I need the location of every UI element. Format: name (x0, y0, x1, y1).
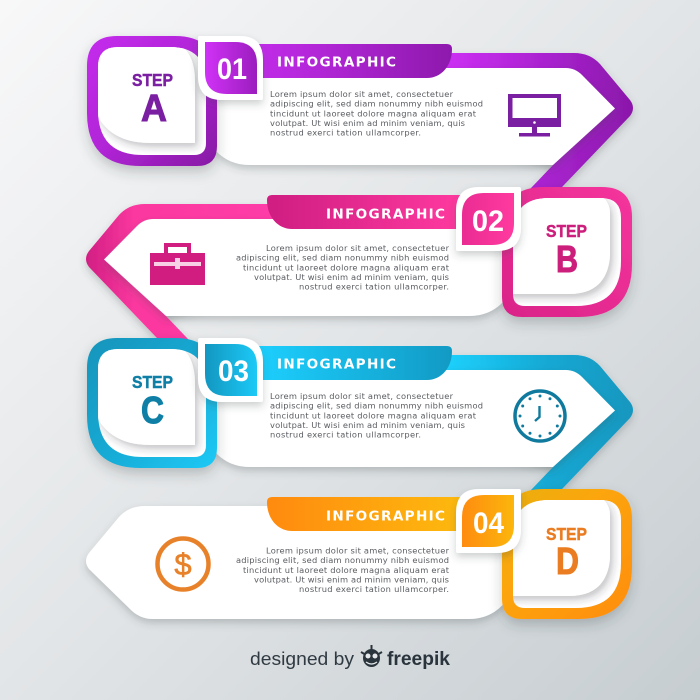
header bar (267, 195, 464, 229)
text block: adipiscing elit, sed diam nonummy nibh euismod (236, 555, 449, 565)
text block: adipiscing elit, sed diam nonummy nibh euismod (270, 99, 483, 109)
text block: volutpat. Ut wisi enim ad minim veniam, quis (270, 118, 465, 128)
text block: adipiscing elit, sed diam nonummy nibh euismod (236, 253, 449, 263)
number badge shape (456, 187, 521, 251)
icon: clock (515, 391, 565, 441)
badge number: 02 (472, 205, 504, 238)
mirrored shapes: pink (82, 186, 638, 340)
text block: nostrud exerci tation ullamcorper. (270, 128, 421, 138)
text block: volutpat. Ut wisi enim ad minim veniam, quis (254, 574, 449, 584)
step label (132, 372, 173, 432)
shapes: blue (81, 338, 636, 490)
heading: INFOGRAPHIC (326, 206, 445, 222)
panel: step A row (80, 36, 636, 188)
heading: INFOGRAPHIC (277, 54, 396, 70)
step block (87, 36, 217, 166)
mirrored shapes: orange (86, 489, 632, 619)
number badge shape (456, 489, 521, 553)
text block: Lorem ipsum dolor sit amet, consectetuer (270, 391, 454, 401)
text block: Lorem ipsum dolor sit amet, consectetuer (270, 89, 454, 99)
text block: nostrud exerci tation ullamcorper. (299, 282, 449, 292)
step block (502, 187, 632, 317)
text block: volutpat. Ut wisi enim ad minim veniam, quis (270, 420, 465, 430)
icon: dollar coin: $ (174, 547, 192, 582)
text block: volutpat. Ut wisi enim ad minim veniam, quis (254, 272, 449, 282)
text block: nostrud exerci tation ullamcorper. (270, 430, 421, 440)
white content body (205, 370, 615, 467)
text block: tincidunt ut laoreet dolore magna aliquam erat (270, 410, 477, 420)
text block: Lorem ipsum dolor sit amet, consectetuer (266, 243, 450, 253)
ribbon and arrow: blue (210, 355, 633, 512)
text block: tincidunt ut laoreet dolore magna aliquam erat (270, 108, 477, 118)
brand text: freepik (387, 648, 450, 670)
step label: C (141, 390, 164, 432)
text block: tincidunt ut laoreet dolore magna aliquam erat (243, 565, 450, 575)
step label: STEP (132, 372, 173, 392)
heading: INFOGRAPHIC (326, 508, 445, 524)
step label (132, 70, 173, 130)
ribbon and arrow: pink (86, 204, 509, 361)
header bar (255, 44, 452, 78)
text block (270, 391, 483, 440)
icon: freepik logo (361, 645, 382, 667)
badge number: 03 (218, 355, 249, 388)
header bar (267, 497, 464, 531)
step label (546, 524, 587, 583)
text block: nostrud exerci tation ullamcorper. (299, 584, 449, 594)
white arrow body (86, 506, 514, 619)
text block (236, 243, 450, 292)
white content body (104, 219, 514, 316)
icon: monitor (508, 94, 561, 136)
step label: D (556, 541, 579, 583)
step label: B (556, 239, 578, 281)
step label: STEP (132, 70, 173, 90)
step label: A (141, 88, 167, 130)
ribbon and arrow: purple (210, 53, 633, 210)
credit text: designed by (250, 649, 354, 669)
step block (87, 338, 217, 468)
step label: STEP (546, 524, 587, 544)
heading: INFOGRAPHIC (277, 356, 396, 372)
icon: briefcase (150, 243, 205, 285)
text block: adipiscing elit, sed diam nonummy nibh euismod (270, 401, 483, 411)
step block (502, 489, 632, 619)
step label: STEP (546, 221, 587, 241)
text block: Lorem ipsum dolor sit amet, consectetuer (266, 546, 450, 556)
panel: step D row (86, 489, 632, 619)
step label (546, 221, 587, 281)
panel: step B row (82, 186, 638, 340)
panel: step C row (81, 338, 636, 490)
text block: tincidunt ut laoreet dolore magna aliquam erat (243, 262, 450, 272)
footer: designed by freepik (250, 645, 450, 670)
white content body (205, 68, 615, 165)
number badge: 01 (217, 53, 247, 86)
icon: dollar coin (158, 538, 208, 590)
number badge shape (198, 338, 263, 402)
number badge (198, 36, 263, 100)
text block (236, 546, 450, 594)
badge number: 04 (473, 507, 504, 540)
header bar (255, 346, 452, 380)
text block (270, 89, 483, 138)
